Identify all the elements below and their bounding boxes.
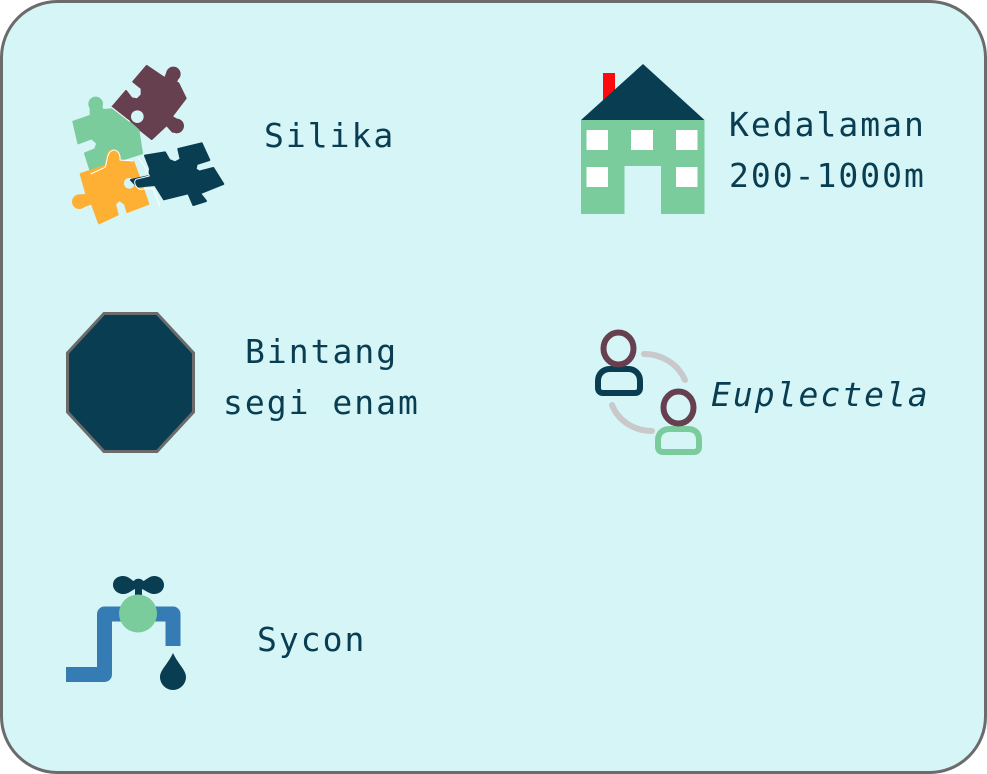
label: Bintang segi enam xyxy=(223,332,420,422)
chimney xyxy=(603,73,615,103)
windows xyxy=(586,130,698,187)
icon: octagon star xyxy=(68,314,194,452)
orange piece xyxy=(73,150,148,223)
label: Bintang segi enam: segi enam xyxy=(223,383,420,422)
label: Euplectela: Euplectela xyxy=(711,375,930,414)
label: Kedalaman 200-1000m: 200-1000m xyxy=(729,156,926,195)
water drop xyxy=(160,653,186,690)
label: Sycon: Sycon xyxy=(257,620,366,659)
green piece xyxy=(73,98,142,171)
roof xyxy=(581,64,704,120)
icon: puzzle pieces xyxy=(73,66,223,223)
person 2 xyxy=(658,429,699,452)
icon: house xyxy=(581,64,704,214)
joins between pieces xyxy=(91,107,160,207)
person 1 xyxy=(598,369,640,393)
label: Bintang segi enam: Bintang xyxy=(245,332,398,371)
label: Silika: Silika xyxy=(264,116,395,155)
navy piece xyxy=(131,143,223,205)
pipe xyxy=(66,614,173,674)
icon: water tap xyxy=(66,576,186,690)
valve xyxy=(119,594,157,632)
arrows xyxy=(644,354,685,380)
handle xyxy=(113,576,164,600)
maroon piece xyxy=(113,66,186,139)
label: Kedalaman 200-1000m: Kedalaman xyxy=(729,105,926,144)
icon: people exchange xyxy=(598,332,699,452)
house body xyxy=(581,120,704,214)
label: Kedalaman 200-1000m xyxy=(729,105,926,195)
